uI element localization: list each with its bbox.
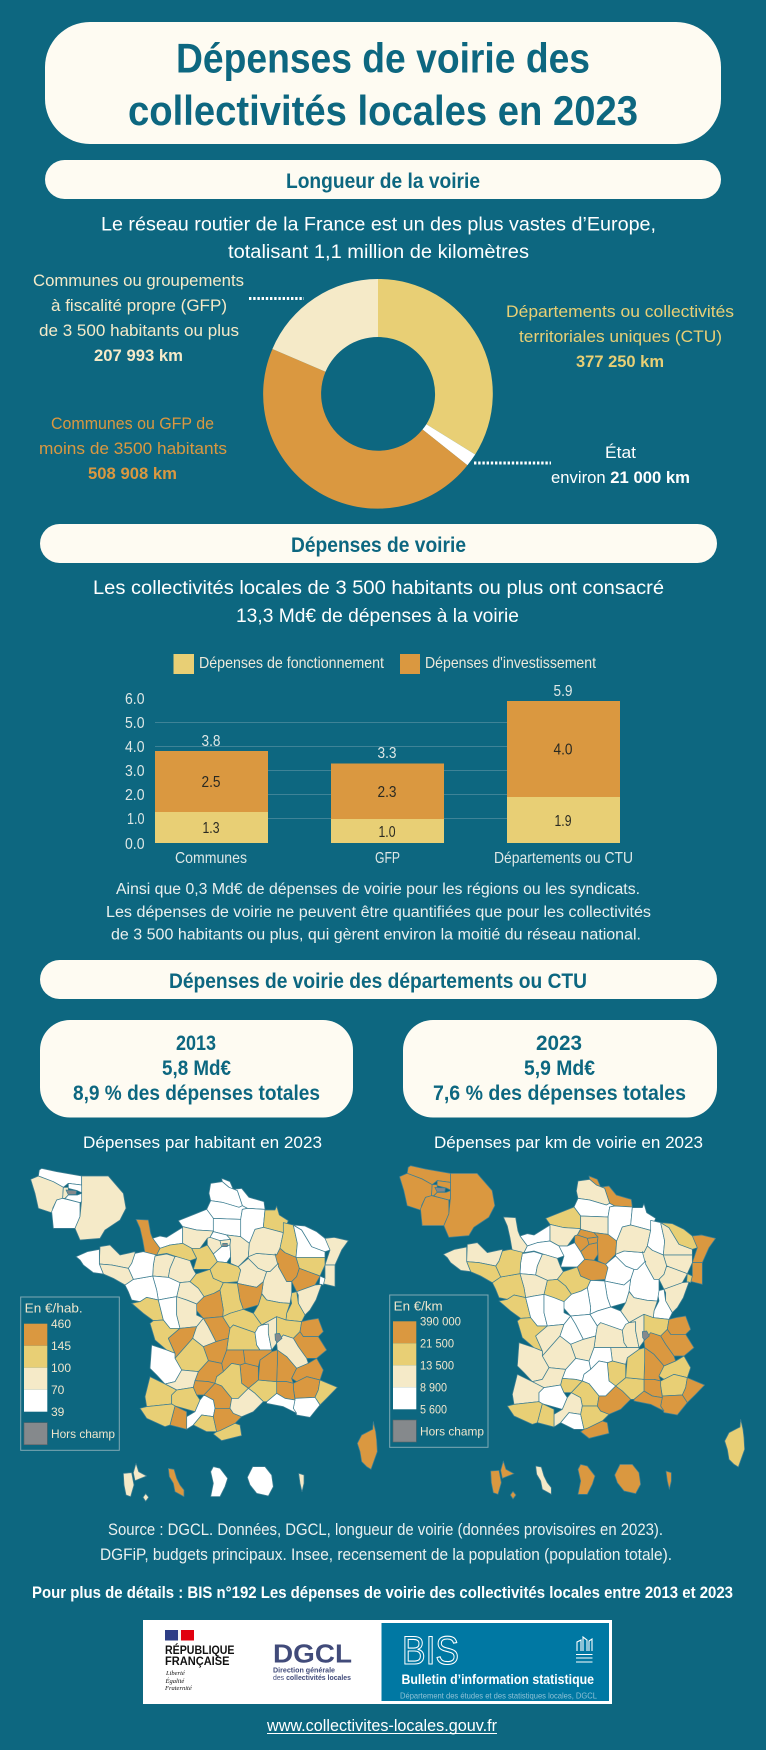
text block: note dépenses: Ainsi que 0,3 Md€ de dépenses de voirie pour les régions ou les syndicats.	[116, 881, 640, 898]
panel: 2013: 2013	[176, 1032, 216, 1055]
logo: DGCL: des collectivités locales	[273, 1673, 351, 1682]
bar chart: dépenses de voirie: 3.8	[202, 733, 221, 750]
text block: 13,3 Md€: 13,3 Md€ de dépenses à la voirie	[236, 606, 519, 627]
chart legend: Dépenses d'investissement	[425, 655, 596, 672]
text block: note dépenses	[106, 881, 651, 944]
text block: réseau routier: totalisant 1,1 million de kilomètres	[228, 242, 529, 263]
map legend: en €/km: En €/km	[394, 1298, 443, 1313]
logo text: République française: FRANÇAISE	[165, 1656, 230, 1668]
text block: 13,3 Md€	[93, 578, 664, 627]
panel: 2023: 5,9 Md€	[524, 1057, 595, 1080]
map legend: en €/hab: 145	[51, 1339, 71, 1353]
map legend: en €/km	[390, 1295, 488, 1447]
bar chart: dépenses de voirie: 1.3	[202, 820, 220, 837]
bar chart: dépenses de voirie: 2.5	[202, 774, 221, 791]
chart legend: Dépenses de fonctionnement	[199, 655, 384, 672]
map legend: en €/hab: 100	[51, 1361, 71, 1375]
map heading: par habitant: Dépenses par habitant en 2023	[83, 1134, 322, 1152]
heading: départements ou CTU	[40, 960, 717, 999]
label: communes de moins de 3500 habitants	[39, 415, 227, 483]
leader line: État	[474, 462, 551, 464]
panel: 2013: 5,8 Md€	[162, 1057, 231, 1080]
bar chart: dépenses de voirie: 6.0	[125, 691, 145, 708]
map: dépenses par habitant	[31, 1168, 377, 1501]
heading: départements ou CTU: Dépenses de voirie des départements ou CTU	[169, 970, 587, 993]
map legend: en €/km: Hors champ	[420, 1424, 484, 1438]
label: communes ou groupements: à fiscalité propre (GFP)	[51, 297, 227, 315]
link: website: www.collectivites-locales.gouv.fr	[266, 1716, 497, 1735]
label: départements: territoriales uniques (CTU)	[519, 328, 722, 346]
label: départements: 377 250 km	[576, 353, 664, 371]
map legend: en €/km: 21 500	[420, 1337, 454, 1351]
label: État: État	[605, 443, 636, 462]
donut chart: longueur de voirie	[263, 279, 493, 509]
icon: French flag	[165, 1630, 194, 1640]
bar chart: dépenses de voirie: 2.3	[378, 784, 397, 801]
panel: BIS: Département des études et des statistiques locales, DGCL	[400, 1690, 597, 1700]
heading: longueur de la voirie	[45, 160, 721, 199]
panel: BIS	[382, 1623, 609, 1701]
text block: note dépenses: Les dépenses de voirie ne peuvent être quantifiées que pour les collectivités	[106, 904, 651, 921]
map legend: en €/km: 13 500	[420, 1359, 454, 1373]
title: collectivités locales en 2023	[128, 87, 638, 134]
panel: 2023	[403, 1020, 717, 1118]
label: communes ou groupements: 207 993 km	[94, 347, 183, 365]
panel: 2013: 8,9 % des dépenses totales	[73, 1082, 320, 1105]
label: communes de moins de 3500 habitants: 508 908 km	[88, 465, 177, 483]
map legend: en €/hab: Hors champ	[51, 1427, 115, 1441]
bar chart: dépenses de voirie: 4.0	[125, 739, 145, 756]
heading: longueur de la voirie: Longueur de la voirie	[286, 170, 480, 193]
text block: source: DGFiP, budgets principaux. Insee, recensement de la population (population totale).	[100, 1546, 672, 1564]
bar chart: dépenses de voirie: 0.0	[125, 836, 145, 853]
logo text: République française: Égalité	[164, 1677, 185, 1685]
map legend: en €/hab	[21, 1297, 119, 1450]
text block: réseau routier	[101, 214, 656, 263]
icon: building	[576, 1637, 592, 1662]
map heading: par km: Dépenses par km de voirie en 2023	[434, 1134, 703, 1152]
bar chart: dépenses de voirie: 3.0	[125, 763, 145, 780]
logo: DGCL	[273, 1639, 352, 1682]
panel: 2023: 7,6 % des dépenses totales	[433, 1082, 686, 1105]
bar chart: dépenses de voirie: 5.9	[554, 683, 573, 700]
text block: réseau routier: Le réseau routier de la France est un des plus vastes d’Europe,	[101, 214, 656, 236]
panel: BIS: Bulletin d’information statistique	[402, 1671, 594, 1687]
label: communes ou groupements: de 3 500 habitants ou plus	[39, 322, 239, 340]
map legend: en €/km: 5 600	[420, 1403, 447, 1417]
logo: DGCL: Direction générale	[273, 1666, 335, 1675]
bar chart: dépenses de voirie: 3.3	[378, 745, 397, 762]
label: communes de moins de 3500 habitants: Communes ou GFP de	[51, 415, 214, 433]
panel: 2013	[40, 1020, 353, 1118]
label: État: environ 21 000 km	[551, 469, 690, 487]
bar chart: dépenses de voirie: 1.9	[554, 813, 572, 830]
bar chart: dépenses de voirie: 4.0	[554, 742, 573, 758]
text block: source	[100, 1521, 672, 1564]
title	[45, 22, 721, 144]
map: dépenses par km de voirie	[399, 1166, 745, 1499]
chart legend	[174, 654, 596, 674]
heading: dépenses de voirie: Dépenses de voirie	[291, 534, 466, 557]
bar chart: dépenses de voirie: Départements ou CTU	[494, 850, 633, 867]
text block: note dépenses: de 3 500 habitants ou plus, qui gèrent environ la moitié du réseau national.	[111, 926, 641, 944]
logo text: République française: RÉPUBLIQUE	[165, 1644, 235, 1657]
logo: DGCL: DGCL	[273, 1639, 352, 1669]
label: communes ou groupements: Communes ou groupements	[33, 272, 244, 290]
panel: 2023: 2023	[536, 1032, 582, 1055]
bar chart: dépenses de voirie: 5.0	[125, 715, 145, 732]
bar chart: dépenses de voirie: 2.0	[125, 787, 145, 804]
bar chart: dépenses de voirie: GFP	[375, 850, 400, 867]
title: Dépenses de voirie des	[176, 34, 590, 82]
heading: dépenses de voirie	[40, 524, 717, 563]
bar chart: dépenses de voirie: Communes	[175, 850, 247, 867]
label: communes ou groupements	[33, 272, 244, 365]
leader line: communes ou groupements	[249, 297, 304, 300]
map legend: en €/hab: 70	[51, 1383, 65, 1397]
logo text: République française: Fraternité	[164, 1685, 193, 1692]
map legend: en €/hab: 460	[51, 1317, 71, 1331]
logo text: République française	[164, 1644, 235, 1692]
map legend: en €/hab: En €/hab.	[25, 1300, 83, 1316]
label: État	[551, 443, 690, 487]
map legend: en €/km: 390 000	[420, 1315, 461, 1329]
bar chart: dépenses de voirie	[125, 683, 633, 867]
label: départements	[506, 303, 734, 371]
logos panel	[143, 1620, 612, 1704]
panel: BIS: BIS	[402, 1629, 459, 1673]
map legend: en €/hab: 39	[51, 1405, 65, 1419]
label: communes de moins de 3500 habitants: moins de 3500 habitants	[39, 440, 227, 458]
map legend: en €/km: 8 900	[420, 1381, 447, 1395]
label: départements: Départements ou collectivités	[506, 303, 734, 321]
bar chart: dépenses de voirie: 1.0	[378, 824, 396, 841]
bar chart: dépenses de voirie: 1.0	[127, 811, 145, 828]
text block: 13,3 Md€: Les collectivités locales de 3 500 habitants ou plus ont consacré	[93, 578, 664, 599]
text block: source: Source : DGCL. Données, DGCL, longueur de voirie (données provisoires en 2023).	[108, 1521, 663, 1539]
logo text: République française: Liberté	[165, 1670, 186, 1677]
